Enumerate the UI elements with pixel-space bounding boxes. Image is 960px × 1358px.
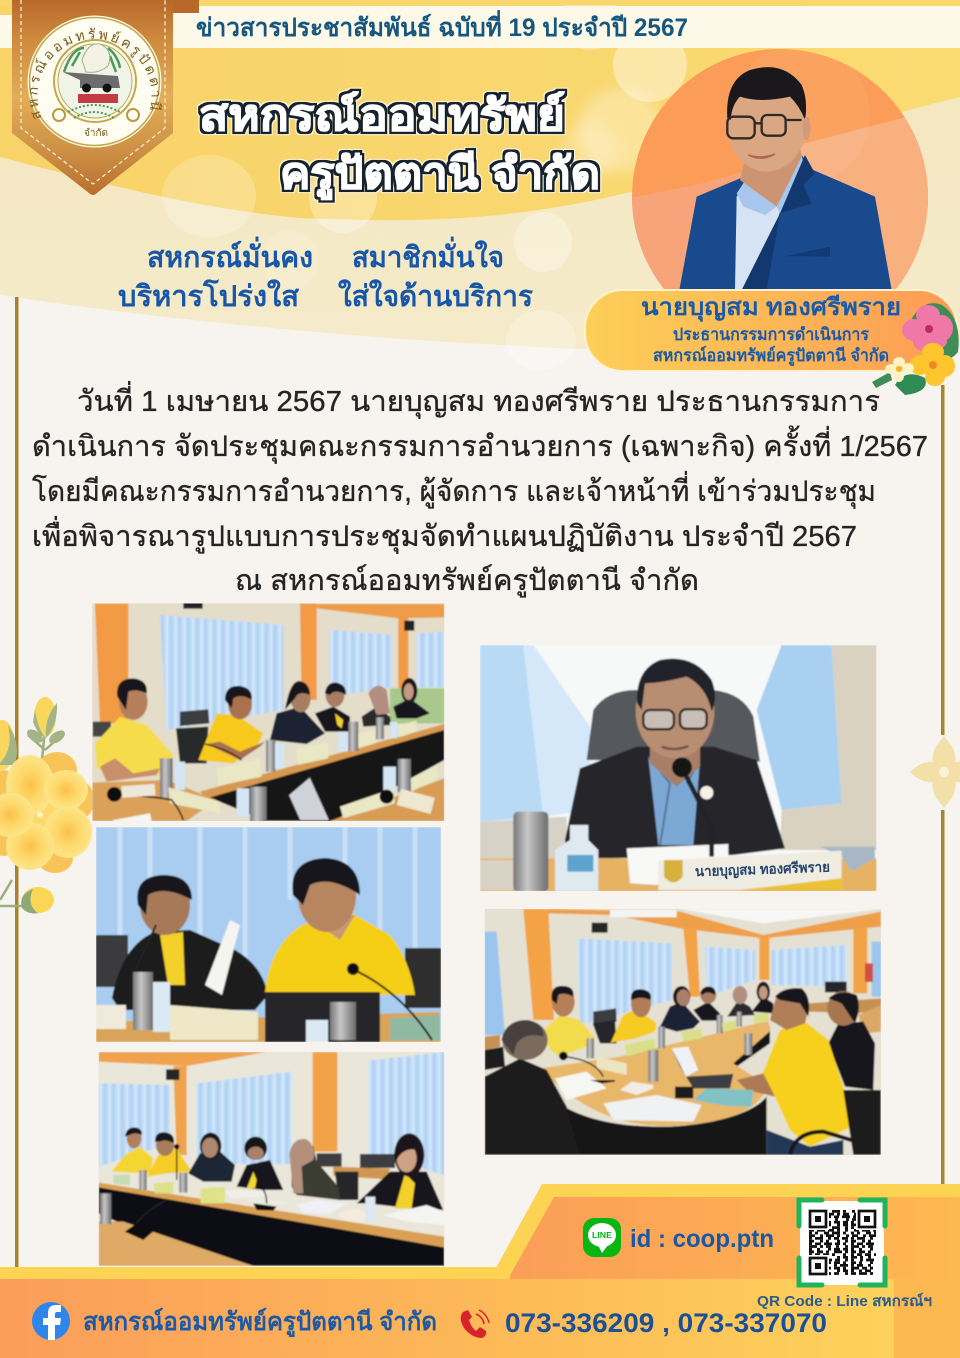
LINE id: id : coop.ptn	[630, 1225, 774, 1253]
main title: สหกรณ์ออมทรัพย์	[199, 91, 565, 140]
icon: Facebook	[32, 1302, 70, 1340]
nameplate text: นายบุญสม ทองศรีพราย	[695, 859, 830, 880]
photo: committee members along table	[90, 602, 447, 823]
name plate: นายบุญสม ทองศรีพราย	[641, 294, 901, 323]
phone numbers: 073-336209 , 073-337070	[505, 1308, 827, 1338]
body text	[32, 381, 928, 598]
name plate: ประธานกรรมการดำเนินการ	[673, 325, 870, 344]
Facebook page name: สหกรณ์ออมทรัพย์ครูปัตตานี จำกัด	[83, 1307, 437, 1338]
header band with newsletter title: ข่าวสารประชาสัมพันธ์ ฉบับที่ 19 ประจำปี 2567	[196, 10, 688, 42]
ribbon with cooperative logo	[12, 0, 199, 195]
main title: ครูปัตตานี จำกัด	[280, 150, 600, 200]
icon: left yellow flower decoration	[0, 697, 94, 913]
slogan: สมาชิกมั่นใจ	[352, 236, 504, 274]
footer bar	[0, 1267, 960, 1358]
logo seal: สหกรณ์ออมทรัพย์ครูปัตตานี	[30, 28, 162, 120]
icon: tropical flowers	[872, 303, 959, 395]
icon: right thai ornament	[910, 737, 960, 807]
photo: meeting room oval table	[483, 907, 883, 1157]
icon: LINE: LINE	[592, 1231, 613, 1240]
body text: เพื่อพิจารณารูปแบบการประชุมจัดทำแผนปฏิบัติงาน ประจำปี 2567	[32, 516, 857, 554]
body text: วันที่ 1 เมษายน 2567 นายบุญสม ทองศรีพราย ประธานกรรมการ	[77, 381, 880, 419]
name plate	[585, 290, 957, 371]
logo seal: จำกัด	[84, 128, 108, 139]
header band with newsletter title	[0, 6, 960, 48]
main title	[199, 91, 600, 200]
name plate: สหกรณ์ออมทรัพย์ครูปัตตานี จำกัด	[653, 345, 889, 367]
body text: โดยมีคณะกรรมการอำนวยการ, ผู้จัดการ และเจ้าหน้าที่ เข้าร่วมประชุม	[32, 471, 876, 509]
portrait circle	[632, 49, 928, 289]
side border lines	[15, 297, 944, 1267]
icon: telephone	[461, 1310, 489, 1338]
slogan: สหกรณ์มั่นคง	[147, 236, 313, 274]
body text: ดำเนินการ จัดประชุมคณะกรรมการอำนวยการ (เฉพาะกิจ) ครั้งที่ 1/2567	[32, 425, 928, 464]
photo: members along table, wide view	[97, 1050, 447, 1268]
footer upper-right panel	[490, 1184, 960, 1279]
icon: LINE	[583, 1218, 621, 1257]
QR code	[799, 1200, 885, 1285]
QR caption: QR Code : Line สหกรณ์ฯ	[757, 1292, 932, 1310]
slogan: ใส่ใจด้านบริการ	[338, 279, 533, 313]
portrait of chairman	[679, 67, 892, 290]
slogan	[118, 236, 533, 313]
body text: ณ สหกรณ์ออมทรัพย์ครูปัตตานี จำกัด	[235, 564, 699, 598]
slogan: บริหารโปร่งใส	[118, 278, 299, 313]
header background bands	[0, 0, 960, 370]
photo: chairman at microphone	[478, 643, 878, 893]
photo: two members speaking	[96, 827, 441, 1042]
